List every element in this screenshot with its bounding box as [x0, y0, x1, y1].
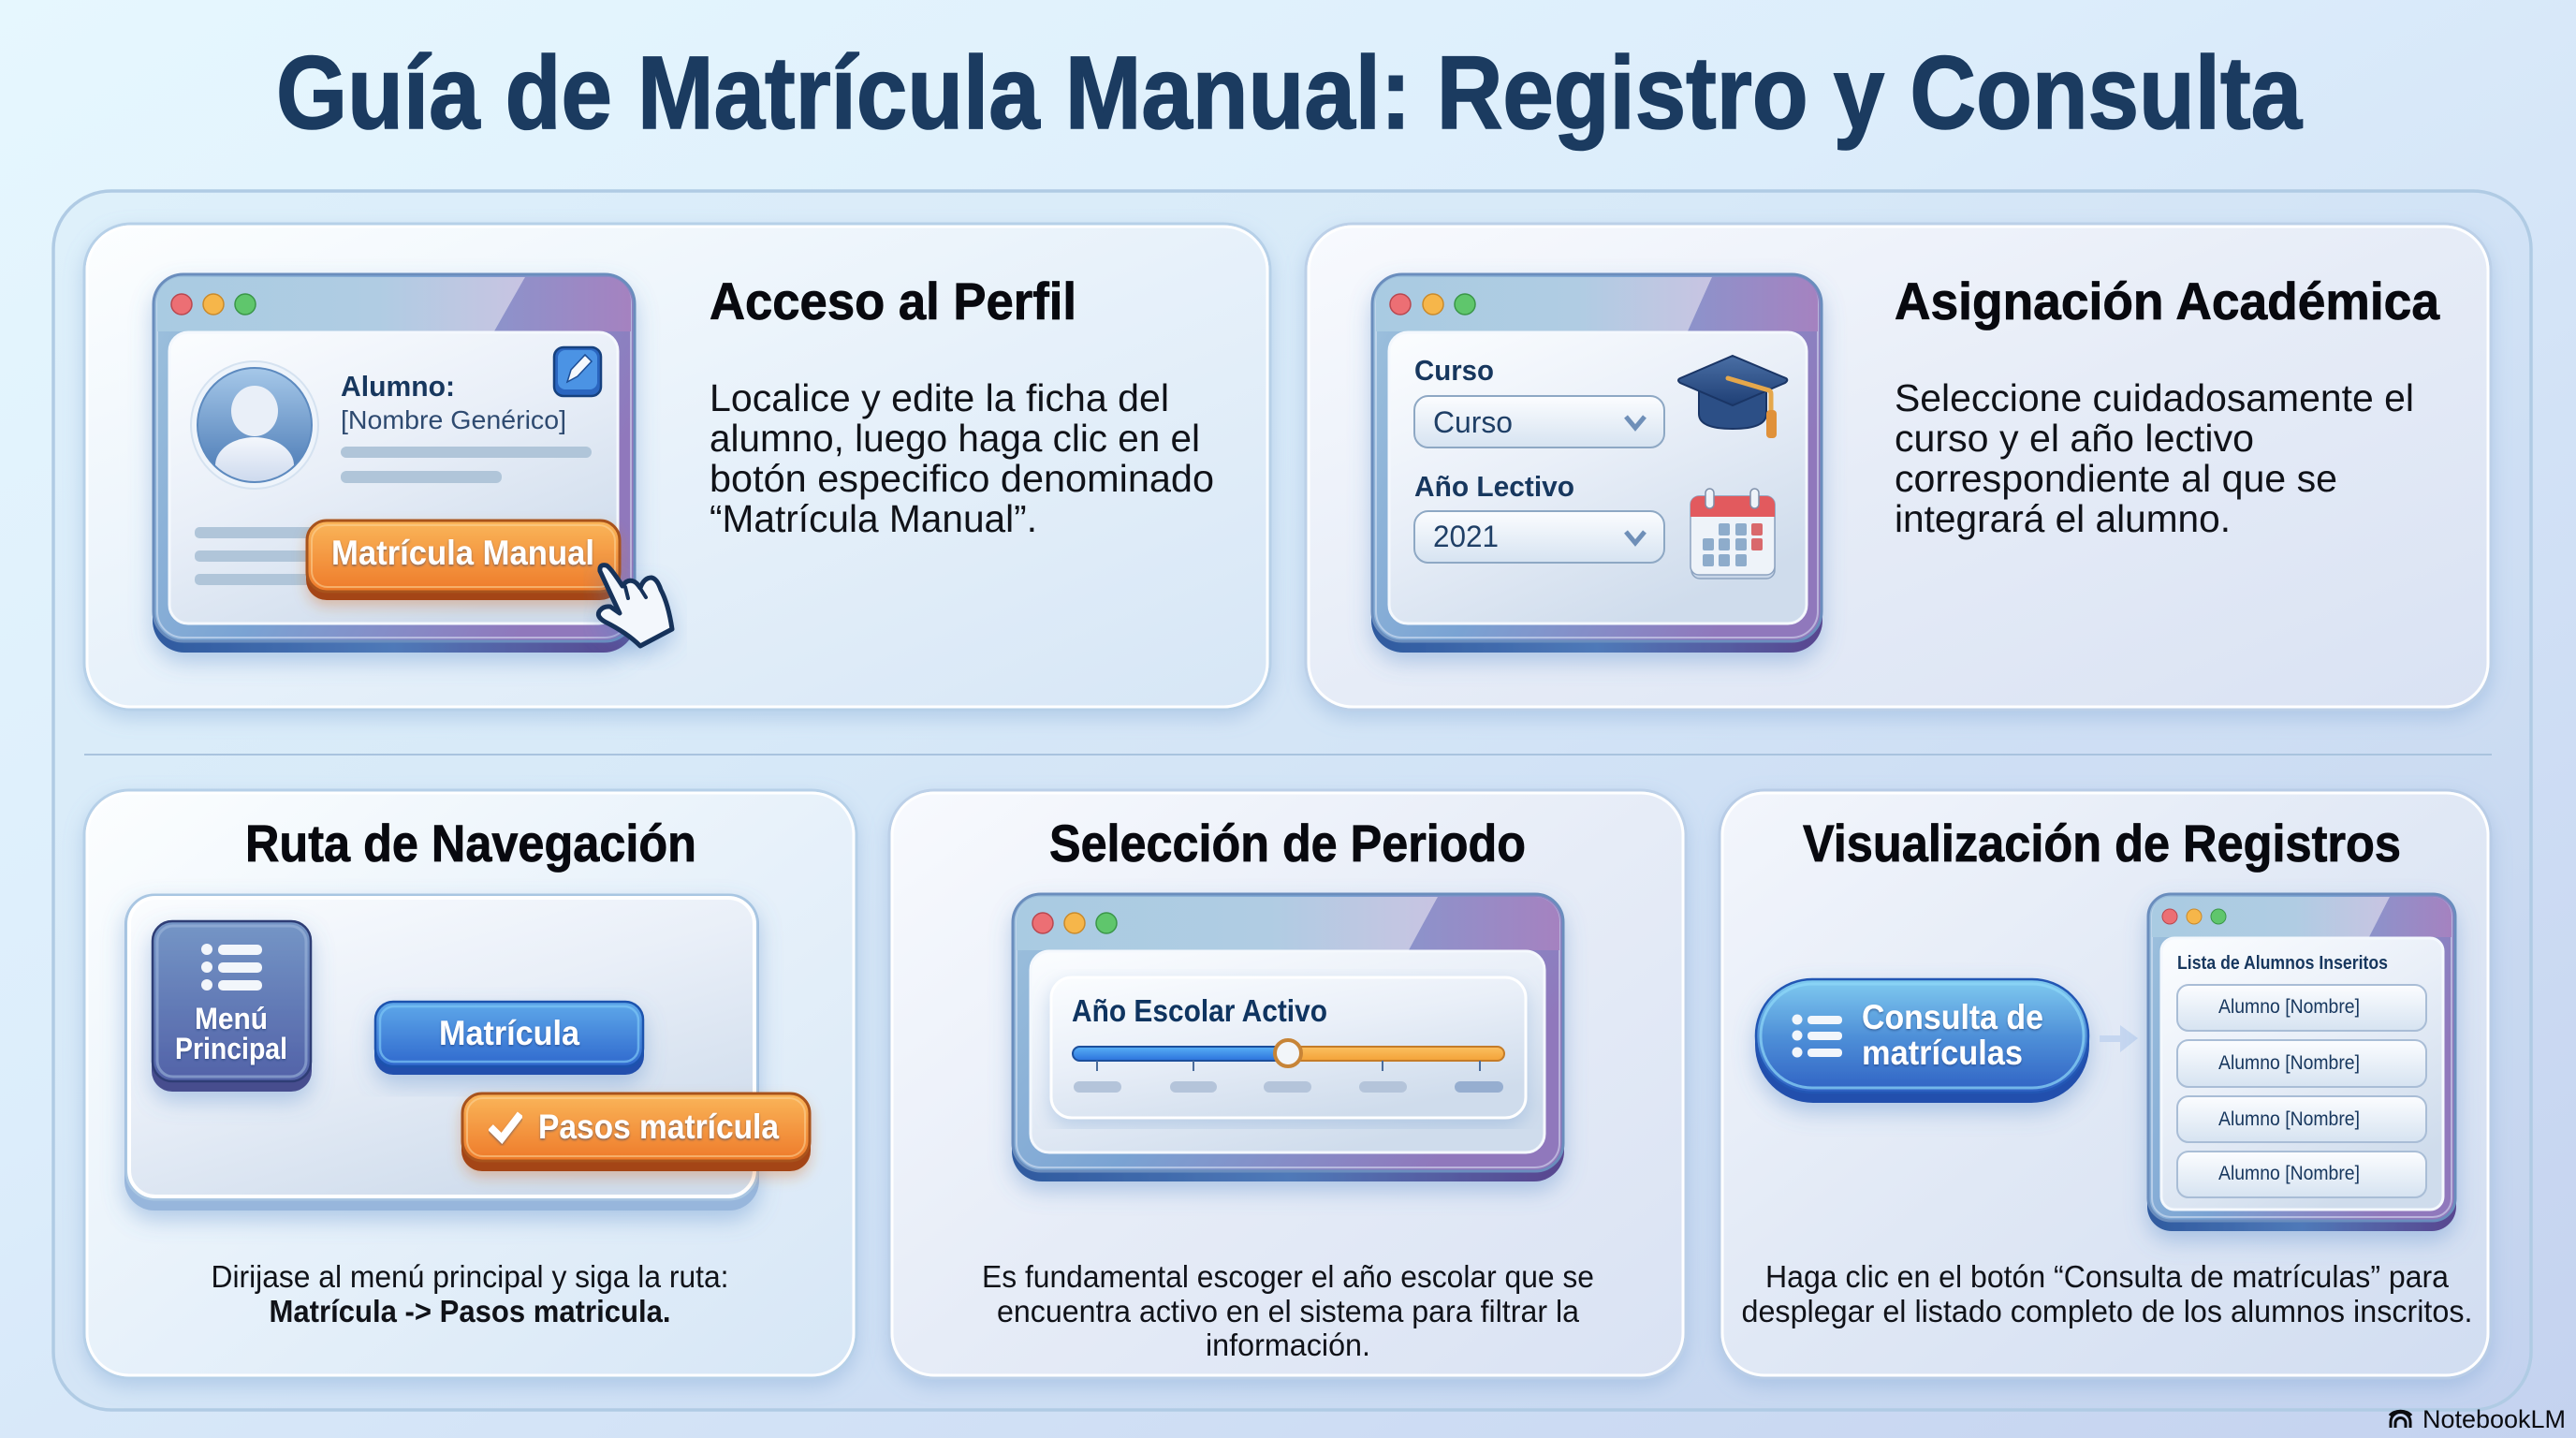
body text: selección de periodo: [982, 1259, 1594, 1362]
button: menú principal: [152, 921, 312, 1092]
body text: acceso al perfil: botón especifico denominado: [710, 457, 1214, 500]
body text: ruta de navegación: Matrícula -> Pasos matricula.: [270, 1294, 670, 1328]
body text: asignación académica: correspondiente al que se: [1895, 457, 2337, 500]
body text: acceso al perfil: Localice y edite la ficha del: [710, 376, 1169, 419]
avatar: [191, 361, 318, 493]
body text: visualización de registros: [1741, 1259, 2473, 1328]
panel: visualización de registros: [1720, 790, 2491, 1378]
panel: asignación académica: [1306, 224, 2491, 710]
watermark: notebooklm: NotebookLM: [2422, 1405, 2566, 1433]
list rows: Alumno [Nombre]: [2218, 996, 2360, 1018]
profile window illustration: [153, 274, 672, 653]
heading: asignación académica: Asignación Académica: [1895, 271, 2440, 330]
slider window illustration: [1012, 894, 1564, 1181]
icon: hand cursor: [598, 565, 672, 646]
button: pasos matrícula: Pasos matrícula: [538, 1108, 779, 1146]
label: año escolar activo: Año Escolar Activo: [1072, 993, 1327, 1028]
panel: ruta de navegación: [84, 790, 856, 1378]
heading: ruta de navegación: Ruta de Navegación: [245, 814, 696, 873]
button: matrícula: Matrícula: [439, 1014, 579, 1052]
student name: Alumno:: [341, 370, 455, 403]
body text: visualización de registros: desplegar el listado completo de los alumnos inscritos.: [1741, 1294, 2473, 1328]
body text: asignación académica: Seleccione cuidadosamente el: [1895, 376, 2414, 419]
heading: selección de periodo: Selección de Periodo: [1049, 814, 1526, 873]
body text: asignación académica: curso y el año lectivo: [1895, 417, 2254, 460]
button: matrícula manual: Matrícula Manual: [331, 534, 594, 572]
body text: selección de periodo: información.: [1206, 1328, 1370, 1362]
button: consulta de matrículas: Consulta de: [1862, 998, 2043, 1036]
list window illustration: [2147, 894, 2456, 1231]
panel: acceso al perfil: [84, 224, 1270, 710]
course window illustration: [1371, 274, 1822, 653]
body text: asignación académica: integrará el alumno.: [1895, 497, 2231, 540]
button: matrícula manual: [306, 520, 621, 600]
button: matrícula: [374, 1002, 644, 1075]
field: año lectivo: Año Lectivo: [1414, 470, 1574, 503]
body text: acceso al perfil: [710, 376, 1214, 540]
list rows: Alumno [Nombre]: [2218, 1108, 2360, 1130]
heading: visualización de registros: Visualización de Registros: [1803, 814, 2401, 873]
navigation illustration: [124, 894, 811, 1211]
field: año lectivo: [1414, 470, 1664, 563]
arrow: [2100, 1025, 2138, 1052]
icon: check mark: [490, 1114, 520, 1138]
field: curso: Curso: [1433, 405, 1513, 439]
body text: ruta de navegación: Dirijase al menú principal y siga la ruta:: [212, 1259, 728, 1294]
slider: [1073, 1040, 1504, 1093]
button: menú principal: Menú: [195, 1002, 268, 1035]
button: menú principal: Principal: [175, 1032, 287, 1065]
list title: Lista de Alumnos Inseritos: [2177, 953, 2388, 974]
field: curso: [1414, 354, 1664, 448]
title: Guía de Matrícula Manual: Registro y Consulta: [276, 36, 2303, 151]
field: año lectivo: 2021: [1433, 520, 1499, 553]
body text: acceso al perfil: “Matrícula Manual”.: [710, 497, 1037, 540]
body text: asignación académica: [1895, 376, 2414, 540]
button: consulta de matrículas: [1755, 979, 2089, 1103]
list rows: [2177, 985, 2426, 1197]
panel: selección de periodo: [889, 790, 1686, 1378]
body text: selección de periodo: Es fundamental escoger el año escolar que se: [982, 1259, 1594, 1294]
button: consulta de matrículas: matrículas: [1862, 1034, 2023, 1072]
heading: acceso al perfil: Acceso al Perfil: [710, 271, 1076, 330]
student name: [341, 370, 566, 434]
body text: selección de periodo: encuentra activo en el sistema para filtrar la: [997, 1294, 1580, 1328]
icon: graduation cap: [1678, 356, 1787, 438]
list rows: Alumno [Nombre]: [2218, 1052, 2360, 1074]
body text: acceso al perfil: alumno, luego haga clic en el: [710, 417, 1200, 460]
body text: visualización de registros: Haga clic en el botón “Consulta de matrículas” para: [1765, 1259, 2450, 1294]
field: curso: Curso: [1414, 354, 1494, 387]
body text: ruta de navegación: [212, 1259, 728, 1328]
icon: edit pencil: [554, 347, 601, 396]
student name: [Nombre Genérico]: [341, 405, 566, 434]
button: pasos matrícula: [461, 1093, 811, 1171]
icon: calendar: [1690, 489, 1775, 579]
list rows: Alumno [Nombre]: [2218, 1163, 2360, 1184]
